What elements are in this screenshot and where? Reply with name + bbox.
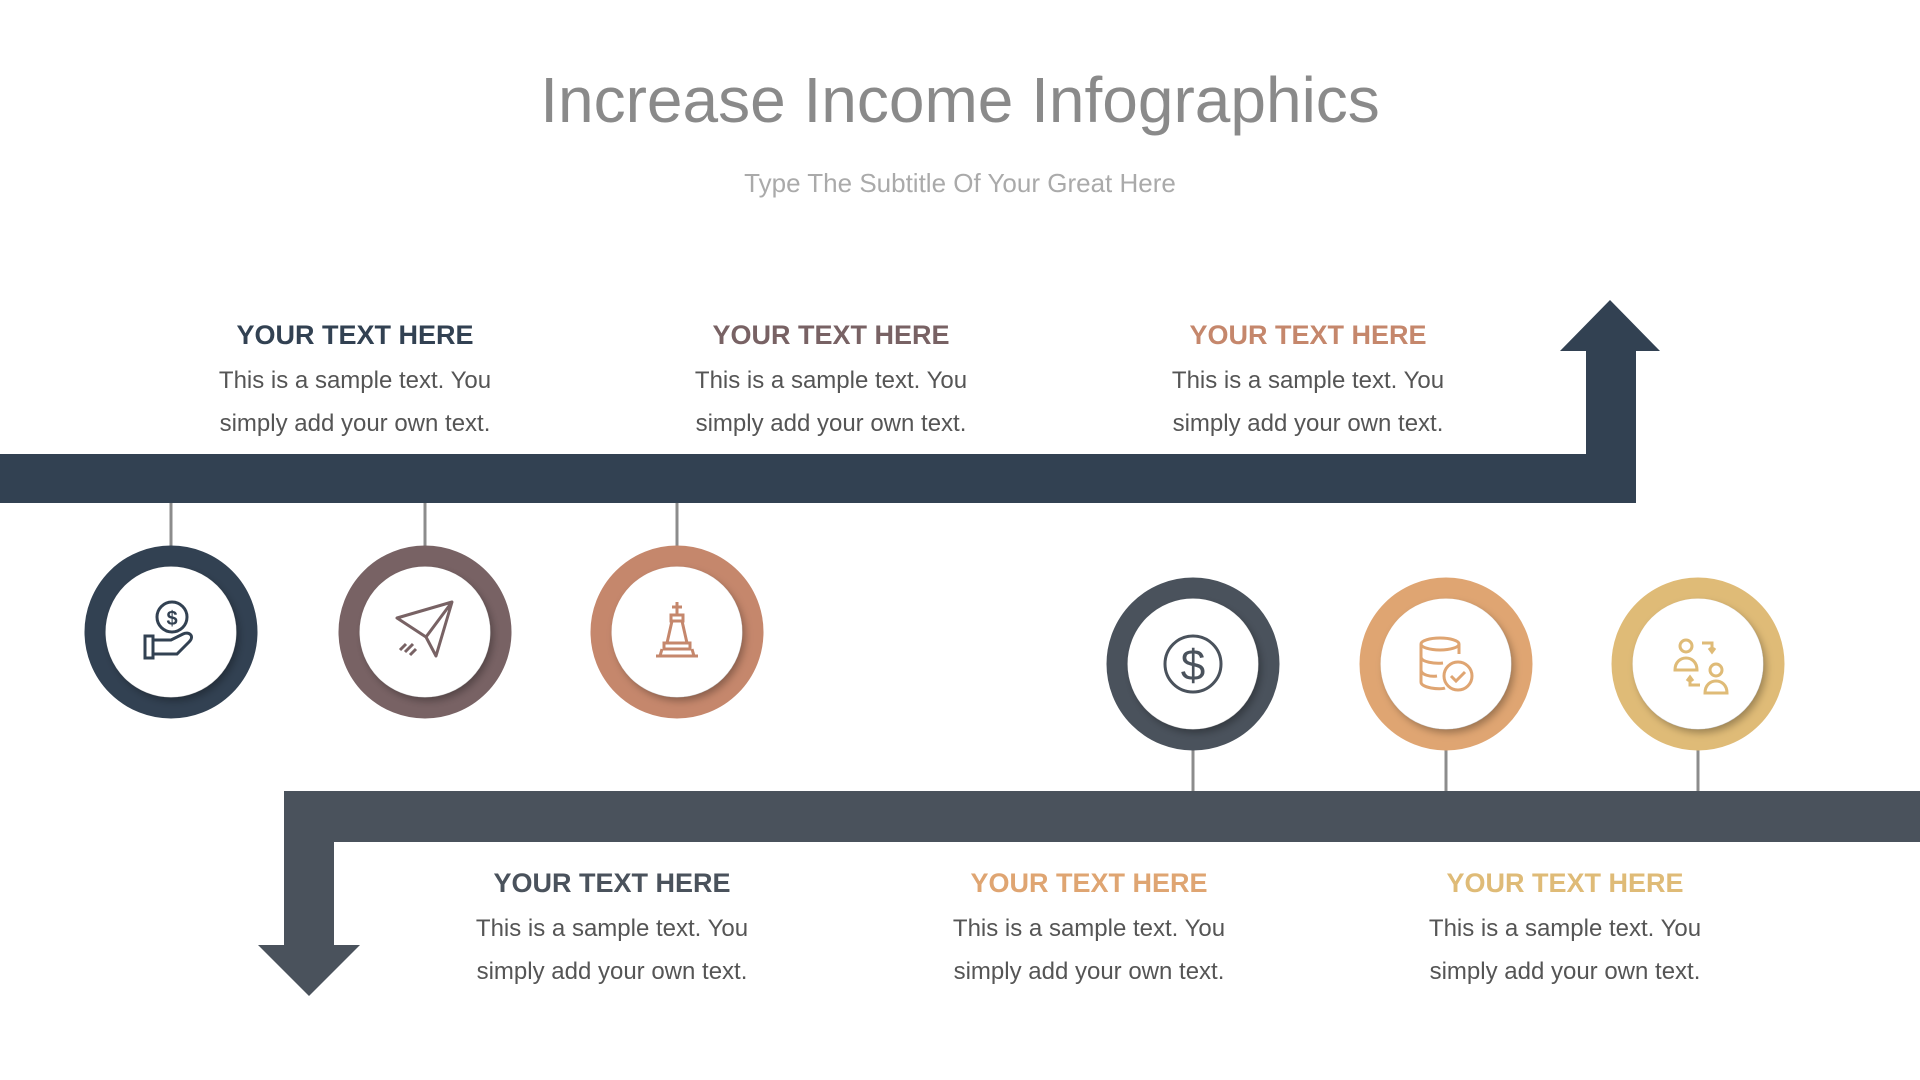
text block: bottom 1: simply add your own text. <box>477 958 747 985</box>
icon circle 3: chess king <box>601 556 753 708</box>
subtitle: Type The Subtitle Of Your Great Here <box>744 168 1176 198</box>
text block: top 1: This is a sample text. You <box>219 367 491 394</box>
title: Increase Income Infographics <box>540 64 1380 136</box>
icon circle 5: database check <box>1370 588 1522 740</box>
text block: top 3: This is a sample text. You <box>1172 367 1444 394</box>
text block: top 3 <box>1172 320 1444 437</box>
text block: top 1 <box>219 320 491 437</box>
text block: bottom 2: This is a sample text. You <box>953 915 1225 942</box>
text block: bottom 2: YOUR TEXT HERE <box>970 868 1208 898</box>
text block: bottom 1: This is a sample text. You <box>476 915 748 942</box>
text block: bottom 2 <box>953 868 1225 985</box>
text block: bottom 3: YOUR TEXT HERE <box>1446 868 1684 898</box>
icon circle 1: hand with coin <box>95 556 247 708</box>
text block: bottom 1 <box>476 868 748 985</box>
icon circle 6: people exchange <box>1622 588 1774 740</box>
text block: top 2 <box>695 320 967 437</box>
icon circle 4: dollar coin <box>1117 588 1269 740</box>
text block: top 3: YOUR TEXT HERE <box>1189 320 1427 350</box>
text block: top 3: simply add your own text. <box>1173 410 1443 437</box>
text block: top 1: simply add your own text. <box>220 410 490 437</box>
text block: bottom 3 <box>1429 868 1701 985</box>
text block: bottom 1: YOUR TEXT HERE <box>493 868 731 898</box>
text block: bottom 3: This is a sample text. You <box>1429 915 1701 942</box>
text block: top 2: YOUR TEXT HERE <box>712 320 950 350</box>
text block: top 1: YOUR TEXT HERE <box>236 320 474 350</box>
arrow: bottom downward <box>258 791 1920 996</box>
text block: top 2: simply add your own text. <box>696 410 966 437</box>
icon circle 1: hand with coin: $ <box>166 608 178 630</box>
arrow: top upward <box>0 300 1660 503</box>
icon circle 2: paper plane <box>349 556 501 708</box>
icon circle 4: dollar coin: $ <box>1181 641 1205 690</box>
text block: bottom 3: simply add your own text. <box>1430 958 1700 985</box>
text block: top 2: This is a sample text. You <box>695 367 967 394</box>
text block: bottom 2: simply add your own text. <box>954 958 1224 985</box>
